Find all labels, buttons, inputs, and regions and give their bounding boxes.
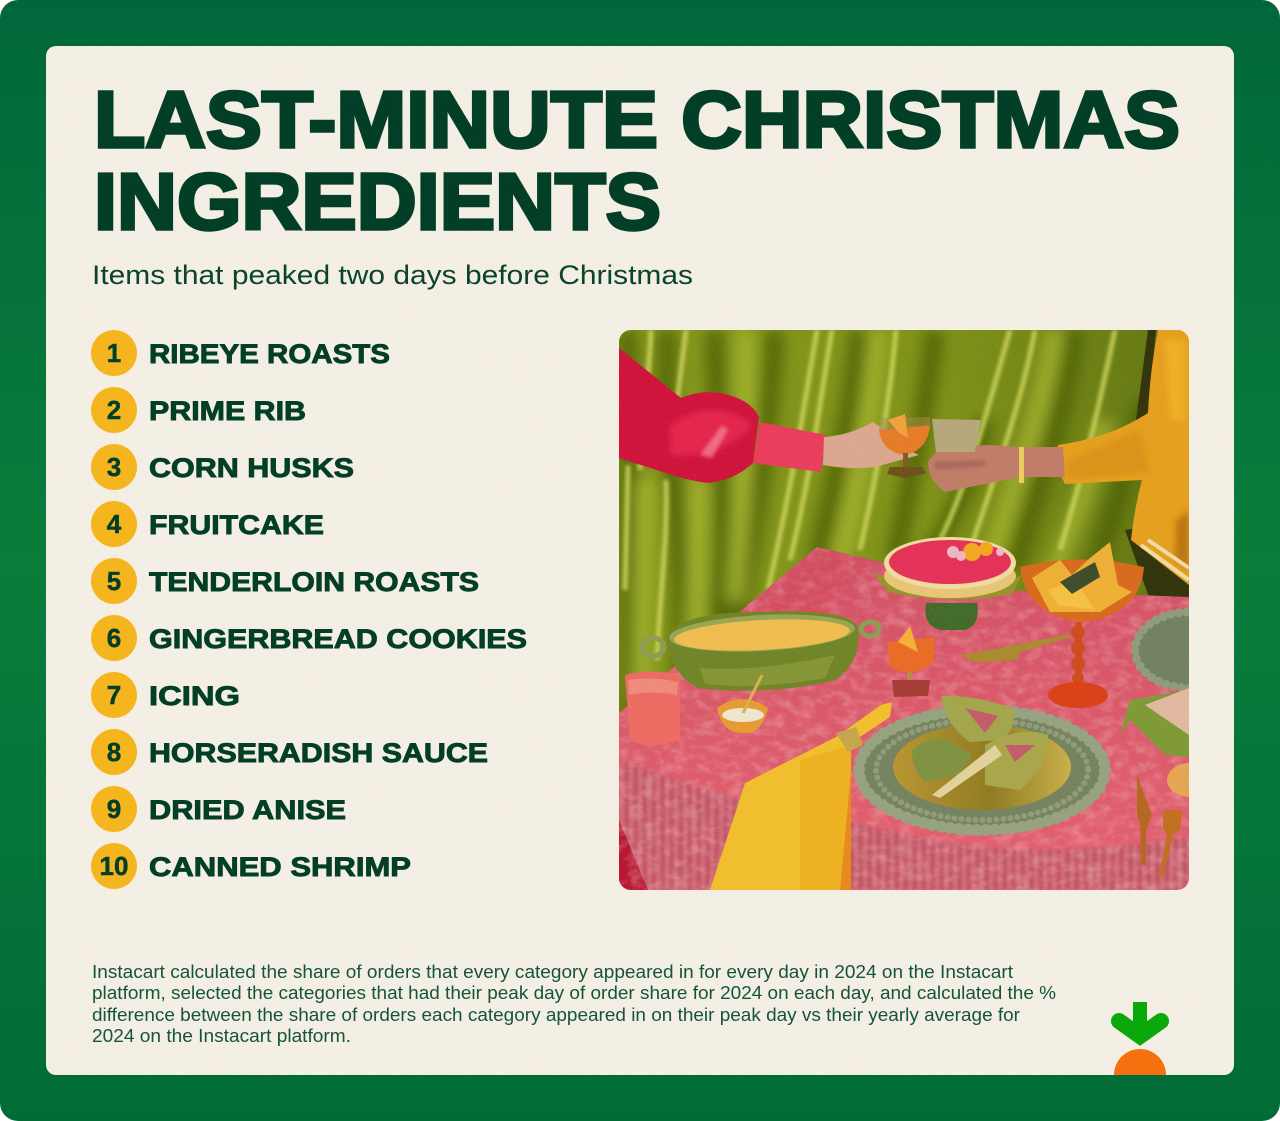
item 8: HORSERADISH SAUCE xyxy=(149,738,488,768)
item 5: 5 xyxy=(107,566,121,596)
right tumbler xyxy=(932,419,981,452)
dark shadow behind sweater xyxy=(1125,330,1189,600)
item 9: 9 xyxy=(107,794,121,824)
item 9: DRIED ANISE xyxy=(149,795,346,825)
item 1: 1 xyxy=(107,338,121,368)
yellow napkin xyxy=(710,702,892,890)
utensil handles xyxy=(1141,540,1189,580)
tart on stand xyxy=(873,537,1022,630)
squash bowl on stem xyxy=(1020,542,1144,708)
cake server xyxy=(960,634,1071,662)
item 10 xyxy=(91,843,411,889)
small rice bowl xyxy=(717,675,768,733)
item 2: 2 xyxy=(107,395,121,425)
item 4: FRUITCAKE xyxy=(149,510,324,540)
item 9 xyxy=(91,786,346,832)
red sleeve xyxy=(619,348,826,483)
item 5 xyxy=(91,558,479,604)
green serving dish with meat xyxy=(1120,688,1189,757)
tablecloth mottling xyxy=(619,540,1189,890)
item 6: 6 xyxy=(107,623,121,653)
item 10: 10 xyxy=(100,851,128,881)
item 8: 8 xyxy=(107,737,121,767)
illustration: holiday table with clinking drinks xyxy=(619,330,1245,890)
footnote text xyxy=(92,962,1056,1046)
footnote text: platform, selected the categories that had their peak day of order share for 2024 on each day, and calculated the % xyxy=(92,983,1056,1003)
item 3: 3 xyxy=(107,452,121,482)
item 1 xyxy=(91,330,390,376)
subtitle: Items that peaked two days before Christmas xyxy=(92,260,693,290)
item 2: PRIME RIB xyxy=(149,396,306,426)
item 7: 7 xyxy=(107,680,121,710)
footnote text: difference between the share of orders each category appeared in on their peak day vs their yearly average for xyxy=(92,1005,1020,1025)
icon: Instacart carrot logo xyxy=(1114,1002,1166,1075)
curtain xyxy=(619,330,1189,730)
item 10: CANNED SHRIMP xyxy=(149,852,411,882)
casserole dish xyxy=(642,610,879,691)
item 5: TENDERLOIN ROASTS xyxy=(149,567,479,597)
item 3 xyxy=(91,444,354,490)
title xyxy=(94,75,1180,246)
item 1: RIBEYE ROASTS xyxy=(149,339,390,369)
item 3: CORN HUSKS xyxy=(149,453,354,483)
item 6: GINGERBREAD COOKIES xyxy=(149,624,527,654)
item 2 xyxy=(91,387,306,433)
knife and fork xyxy=(1137,775,1182,877)
item 7 xyxy=(91,672,240,718)
item 4: 4 xyxy=(107,509,122,539)
footnote text: Instacart calculated the share of orders that every category appeared in for every day in 2024 on the Instacart xyxy=(92,962,1013,982)
item 8 xyxy=(91,729,488,775)
orange drink xyxy=(887,626,935,697)
pink drink xyxy=(625,672,680,745)
sweater xyxy=(1057,330,1189,585)
right hand and forearm xyxy=(928,445,1065,492)
tablecloth top xyxy=(619,547,1189,890)
artichokes xyxy=(912,696,1048,798)
ranked ingredient list xyxy=(91,330,527,889)
charger plate xyxy=(858,710,1106,830)
left hand xyxy=(823,422,919,468)
item 7: ICING xyxy=(149,681,240,711)
left coupe glass xyxy=(879,414,930,478)
title: INGREDIENTS xyxy=(94,157,661,246)
item 6 xyxy=(91,615,527,661)
footnote text: 2024 on the Instacart platform. xyxy=(92,1026,351,1046)
hanging tablecloth xyxy=(619,760,1189,890)
side plate xyxy=(1130,608,1189,692)
item 4 xyxy=(91,501,324,547)
dip bowl xyxy=(1167,763,1189,797)
title: LAST-MINUTE CHRISTMAS xyxy=(94,75,1180,164)
